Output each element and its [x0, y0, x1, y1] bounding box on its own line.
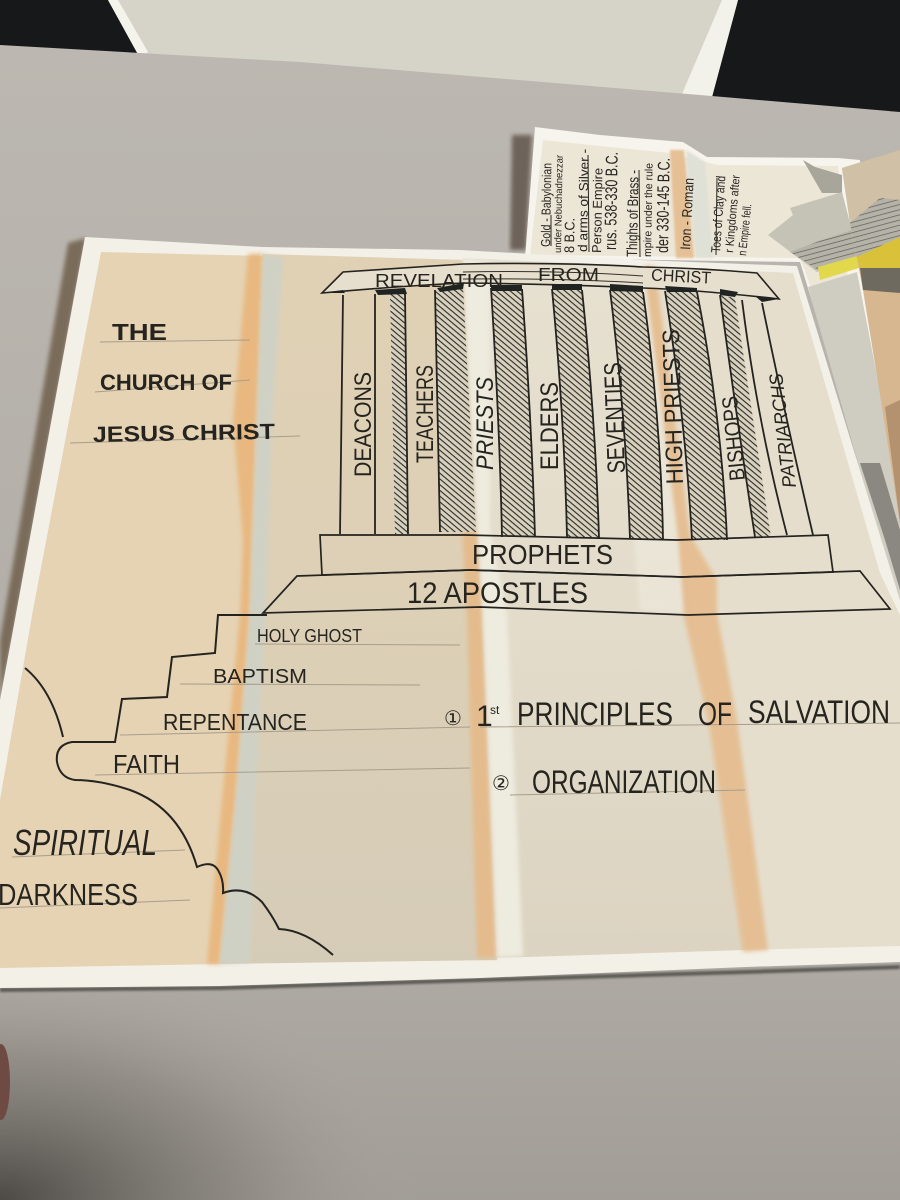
back sheet captions: rus. 538-330 B.C.	[601, 152, 622, 250]
pillar labels	[350, 329, 801, 489]
back sheet captions: Gold - Babylonian	[538, 163, 554, 247]
step labels	[113, 626, 362, 779]
pediment: Revelation from Christ: CHRIST	[651, 266, 712, 288]
back sheet captions: n Empire fell.	[735, 203, 754, 256]
apostles tier	[263, 570, 890, 615]
numbered list: ①	[444, 708, 462, 730]
title: THE	[112, 319, 167, 345]
hatched pillar shafts	[390, 286, 771, 540]
pediment: Revelation from Christ	[322, 263, 779, 302]
back sheet captions: 8 B.C.	[561, 218, 578, 253]
spiritual darkness label: SPIRITUAL	[13, 822, 157, 863]
back sheet captions: d arms of Silver -	[575, 149, 592, 252]
pillar labels: SEVENTIES	[599, 362, 631, 474]
pillar labels: DEACONS	[350, 372, 377, 477]
pillar labels: HIGH PRIESTS	[658, 329, 689, 485]
title: JESUS CHRIST	[93, 419, 276, 447]
back sheet captions: Iron - Roman	[677, 177, 697, 250]
numbered list: ORGANIZATION	[532, 764, 716, 800]
pediment: Revelation from Christ: FROM	[538, 265, 599, 285]
back sheet captions	[538, 149, 754, 257]
pillar labels: BISHOPS	[717, 395, 750, 482]
spiritual darkness label: DARKNESS	[0, 877, 138, 912]
faint guide lines	[0, 340, 900, 908]
prophets tier: PROPHETS	[472, 539, 613, 570]
numbered list: ②	[492, 773, 510, 795]
fold bands	[207, 254, 768, 964]
temple columns	[340, 286, 813, 540]
numbered list: OF	[698, 696, 732, 732]
third sheet: tan statue panel	[842, 150, 900, 523]
numbered list: PRINCIPLES	[517, 696, 673, 732]
statue stone and gold band	[768, 160, 900, 600]
pillar labels: PRIESTS	[472, 377, 499, 470]
back sheet captions: under Nebuchadnezzar	[553, 154, 566, 253]
back sheet: statue chart with captions	[525, 127, 900, 600]
title: CHURCH OF	[100, 370, 232, 395]
cloth hem	[0, 237, 900, 988]
back sheet captions: r Kingdoms after	[722, 174, 743, 253]
prophets tier	[320, 535, 833, 577]
back sheet captions: Person Empire	[589, 168, 605, 253]
numbered list: st	[490, 703, 500, 717]
step labels: BAPTISM	[213, 666, 307, 688]
staircase and cloud outline	[25, 615, 333, 955]
cloth panels	[0, 252, 900, 968]
numbered list	[444, 694, 890, 800]
pillar labels: PATRIARCHS	[766, 372, 801, 489]
main cloth chart	[0, 237, 900, 988]
back sheet captions: Thighs of Brass -	[624, 170, 643, 257]
back sheet captions: mpire under the rule	[642, 163, 656, 257]
back sheet captions: der 330-145 B.C.	[653, 158, 674, 253]
spiritual darkness label	[0, 822, 157, 912]
back sheet captions: Toes of Clay and	[708, 175, 728, 253]
title	[93, 319, 276, 447]
pillar outlines	[340, 288, 813, 540]
apostles tier: 12 APOSTLES	[407, 577, 588, 610]
pillar labels: TEACHERS	[412, 365, 439, 463]
step labels: FAITH	[113, 749, 180, 779]
step labels: HOLY GHOST	[257, 626, 362, 646]
pediment: Revelation from Christ: REVELATION	[375, 271, 503, 291]
pillar labels: ELDERS	[536, 382, 564, 470]
numbered list: 1	[476, 700, 493, 733]
step labels: REPENTANCE	[163, 709, 307, 735]
